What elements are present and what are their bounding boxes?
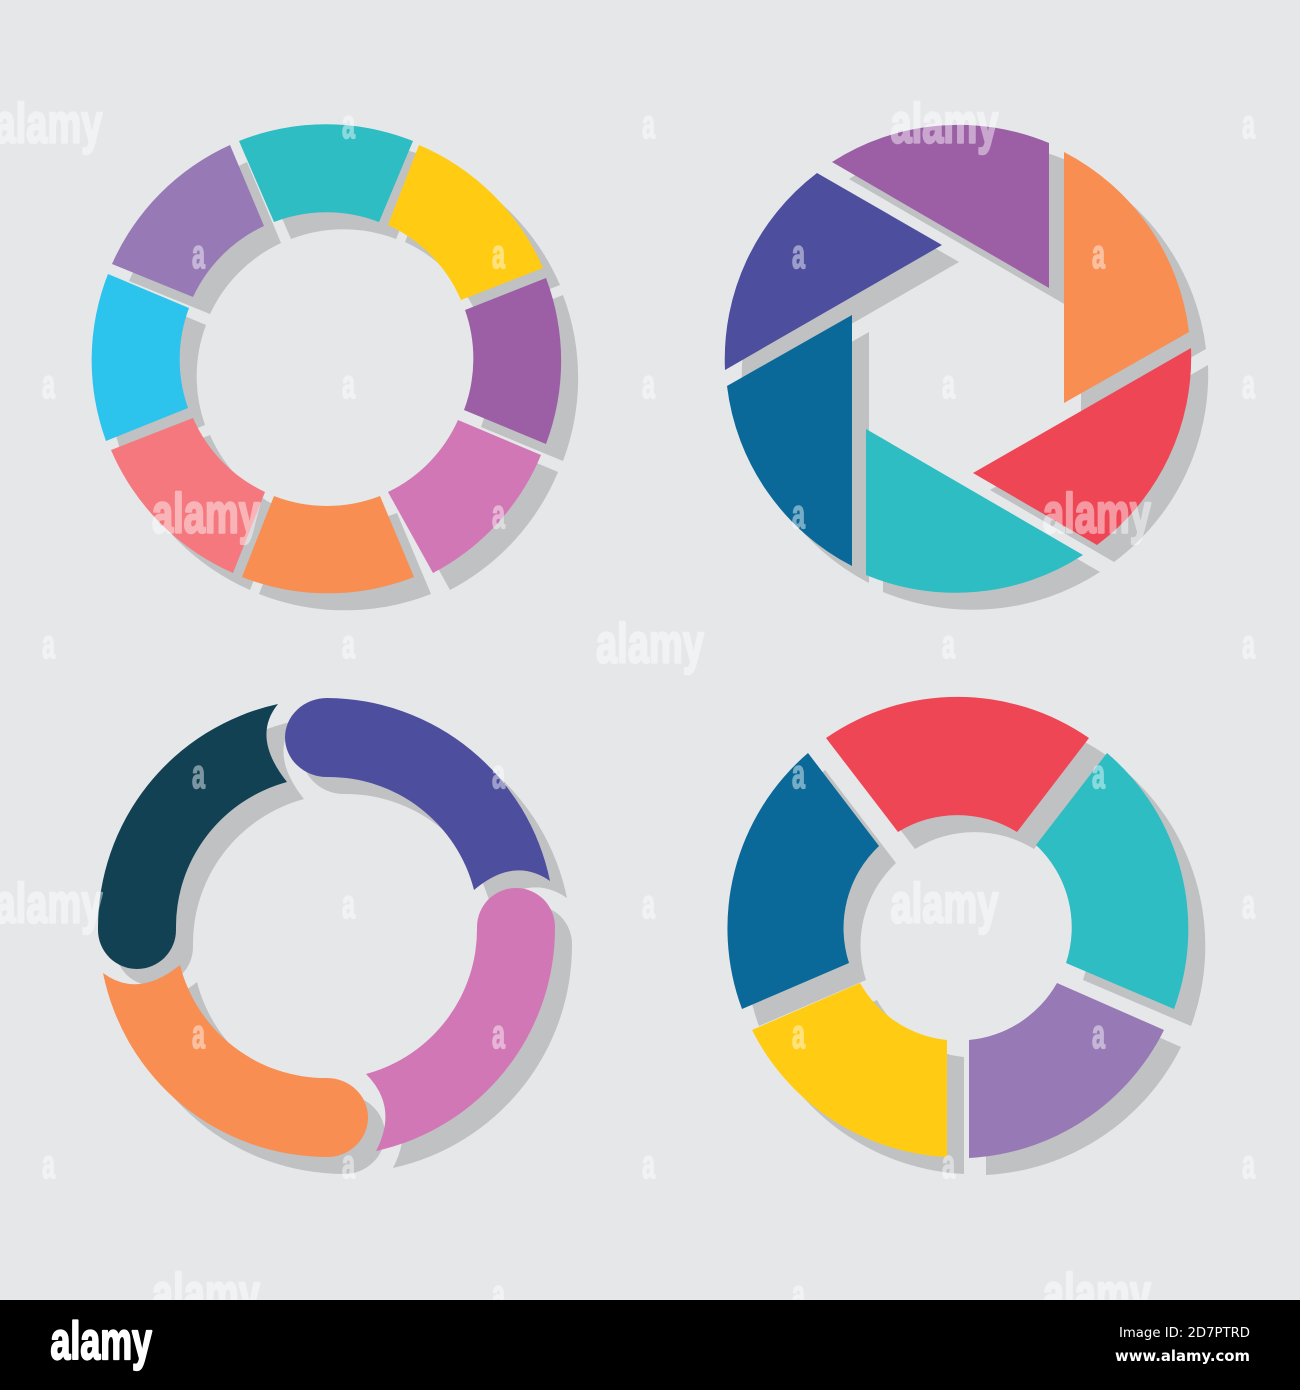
segment: teal	[239, 124, 413, 222]
watermark: small letter marks: a	[642, 362, 655, 408]
watermark: small letter marks: a	[1092, 232, 1105, 278]
watermark: small letter marks: a	[642, 1142, 655, 1188]
watermark: small letter marks: a	[642, 882, 655, 928]
watermark: small letter marks: a	[492, 1012, 505, 1058]
segment: red	[826, 697, 1089, 832]
watermark: small letter marks: a	[792, 232, 805, 278]
watermark: small letter marks: a	[642, 102, 655, 148]
arc: indigo	[285, 698, 550, 890]
blade: red	[973, 348, 1191, 545]
watermark: small letter marks: a	[792, 1272, 805, 1318]
watermark: large alamy marks: alamy	[890, 93, 999, 155]
watermark: small letter marks: a	[942, 1142, 955, 1188]
shadow: aperture blades	[742, 142, 1208, 610]
watermark: large alamy marks: alamy	[596, 613, 704, 675]
watermark: small letter marks: a	[1242, 622, 1255, 668]
blade: indigo	[725, 173, 942, 370]
blade: teal	[866, 429, 1083, 593]
watermark: large alamy marks: alamy	[1043, 1263, 1151, 1325]
watermark: large alamy marks: alamy	[1043, 483, 1151, 545]
watermark: small letter marks: a	[192, 232, 205, 278]
watermark: large alamy marks: alamy	[152, 483, 260, 545]
segment: teal	[1036, 753, 1188, 1009]
segment: purple	[464, 278, 561, 444]
watermark: small letter marks: a	[192, 1012, 205, 1058]
segment: yellow	[388, 145, 543, 300]
shadow: rounded arcs	[115, 715, 572, 1174]
arc: pink	[366, 888, 555, 1151]
chart: four rounded arrow arcs	[98, 698, 572, 1174]
chart: five-segment donut	[727, 697, 1205, 1175]
watermark: small letter marks: a	[492, 232, 505, 278]
watermark: small letter marks: a	[942, 362, 955, 408]
watermark: small letter marks: a	[342, 1142, 355, 1188]
watermark: small letter marks: a	[342, 622, 355, 668]
watermark: small letter marks: a	[492, 1272, 505, 1318]
watermark: large alamy marks	[0, 93, 1151, 1325]
footer logo: alamy	[50, 1311, 152, 1371]
chart: eight-segment ring	[92, 124, 578, 610]
segment: salmon	[111, 418, 265, 573]
shadow: eight-segment ring	[109, 141, 578, 610]
footer url: www.alamy.com	[1115, 1347, 1250, 1365]
footer band	[0, 1300, 1300, 1390]
blade: orange	[1064, 152, 1189, 403]
watermark: large alamy marks: alamy	[890, 873, 999, 935]
segment: orange	[242, 496, 414, 593]
blade: blue	[727, 315, 852, 566]
watermark: small letter marks: a	[42, 362, 55, 408]
arc: orange	[103, 965, 368, 1157]
chart: six-blade aperture	[725, 125, 1208, 610]
watermark: small letter marks: a	[492, 752, 505, 798]
watermark: small letter marks: a	[792, 492, 805, 538]
segment: lilac	[969, 983, 1164, 1158]
segment: yellow	[752, 983, 947, 1157]
watermark: small letter marks: a	[192, 752, 205, 798]
watermark: small letter marks: a	[792, 1012, 805, 1058]
watermark: small letter marks: a	[342, 102, 355, 148]
watermark: small letter marks: a	[942, 622, 955, 668]
footer image id: Image ID: 2D7PTRD	[1119, 1325, 1250, 1341]
segment: sky blue	[92, 274, 189, 441]
watermark: small letter marks: a	[792, 752, 805, 798]
arc: dark teal	[98, 704, 287, 969]
watermark: small letter marks: a	[1242, 362, 1255, 408]
watermark: large alamy marks: alamy	[152, 1263, 260, 1325]
watermark: small letter marks: a	[1092, 1012, 1105, 1058]
watermark: small letter marks: a	[1092, 752, 1105, 798]
watermark: small letter marks: a	[1242, 102, 1255, 148]
segment: lilac	[112, 145, 264, 297]
shadow: five-segment donut	[744, 714, 1205, 1175]
watermark: small letter marks: a	[342, 882, 355, 928]
watermark: small letter marks: a	[1242, 1142, 1255, 1188]
segment: blue	[727, 753, 879, 1009]
blade: purple	[832, 125, 1049, 288]
watermark: small letter marks: a	[42, 1142, 55, 1188]
watermark: small letter marks: a	[492, 492, 505, 538]
segment: pink	[388, 420, 541, 573]
watermark: small letter marks: a	[342, 362, 355, 408]
watermark: small letter marks: a	[42, 622, 55, 668]
watermark: small letter marks: a	[1242, 882, 1255, 928]
